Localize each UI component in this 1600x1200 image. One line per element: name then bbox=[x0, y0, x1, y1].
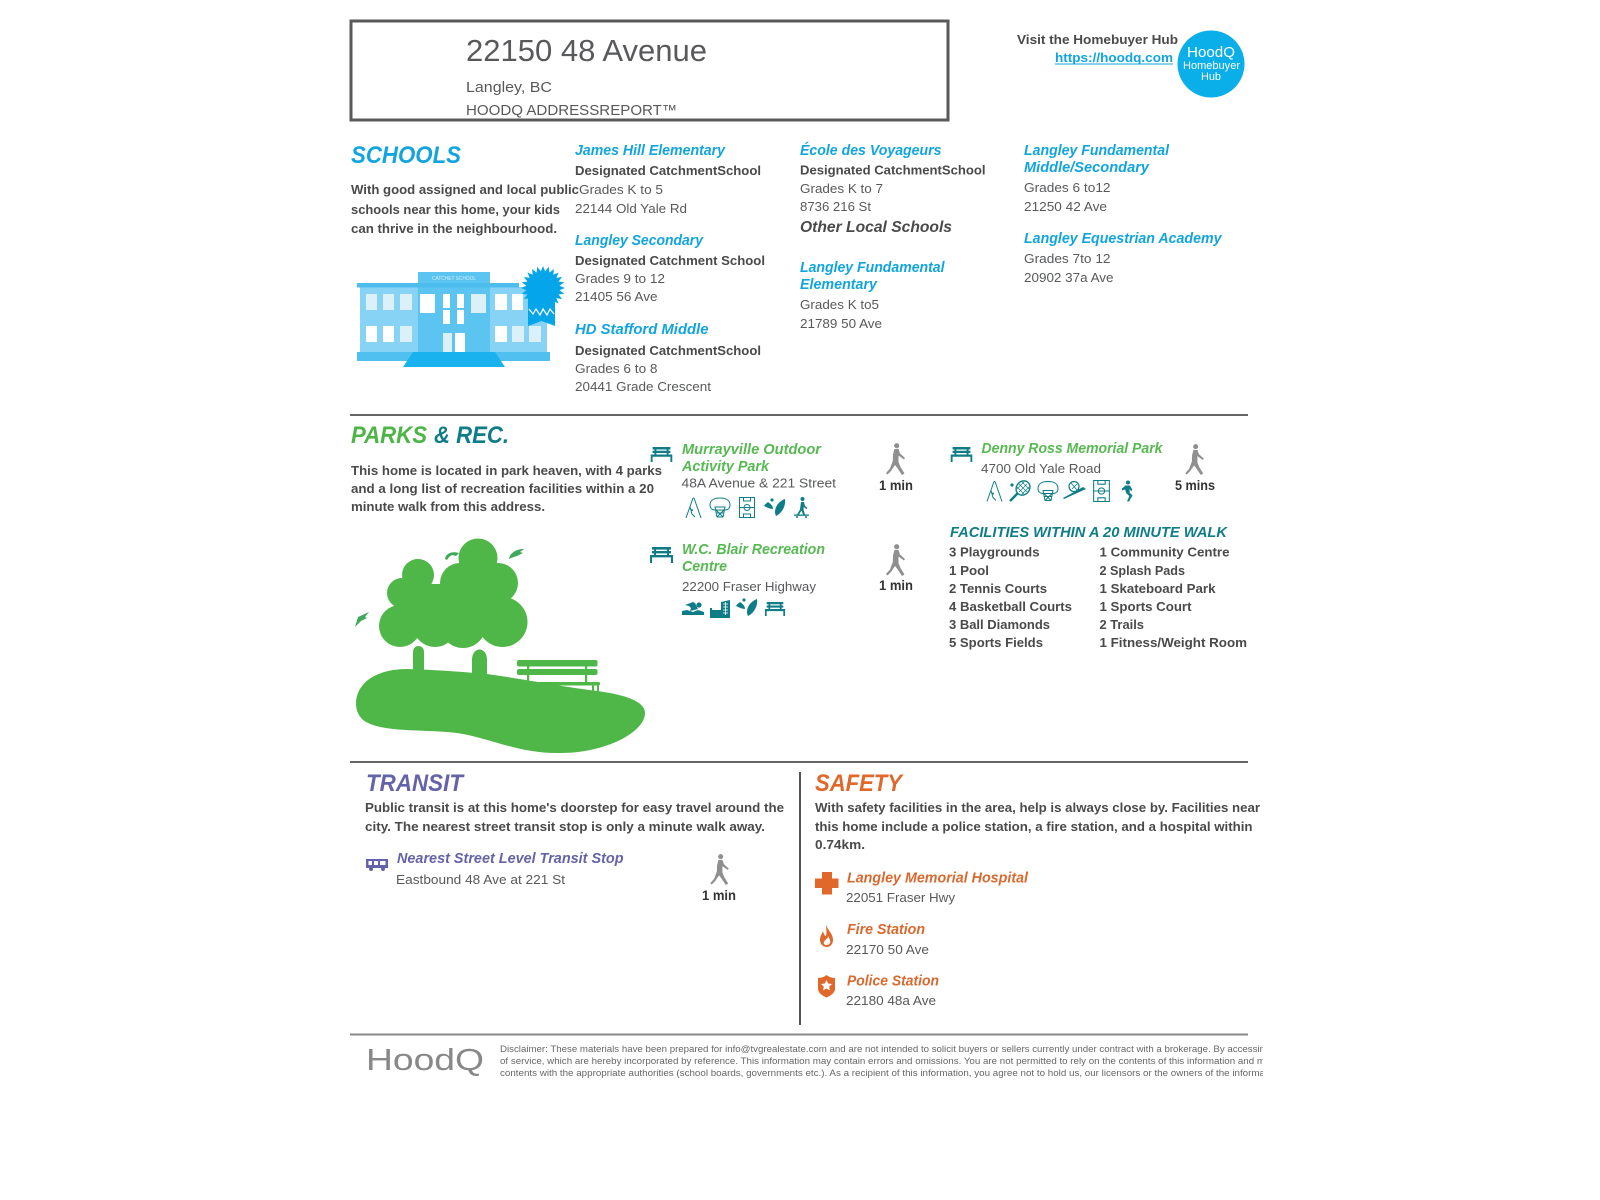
illustration: park with trees and bench bbox=[356, 538, 645, 753]
school: Langley Fundamental Elementary: Elementary bbox=[800, 277, 878, 293]
walk time bbox=[702, 854, 736, 903]
school: Ecole des Voyageurs: Designated CatchmentSchool bbox=[800, 162, 986, 178]
transit stop bbox=[396, 851, 624, 887]
school: Langley Equestrian Academy: Grades 7to 12 bbox=[1024, 251, 1110, 266]
walk time: 1 min bbox=[879, 578, 913, 593]
icon: flame bbox=[820, 924, 833, 947]
school: Langley Secondary: Grades 9 to 12 bbox=[575, 271, 665, 286]
transit intro: Public transit is at this home's doorstep for easy travel around the bbox=[365, 800, 784, 815]
homebuyer hub callout bbox=[1017, 30, 1244, 98]
facility icons bbox=[686, 497, 809, 518]
icon: bench bbox=[650, 547, 673, 563]
hub badge bbox=[1178, 30, 1244, 98]
panel: safety bbox=[815, 770, 1260, 1008]
school: Langley Equestrian Academy: 20902 37a Ave bbox=[1024, 270, 1114, 285]
header address box bbox=[351, 21, 948, 120]
facility icons bbox=[682, 598, 785, 618]
facilities right column: 2 Splash Pads bbox=[1100, 563, 1185, 578]
school: Langley Fundamental Elementary: 21789 50 Ave bbox=[800, 316, 882, 331]
walk time: 5 mins bbox=[1175, 478, 1215, 493]
schools intro: can thrive in the neighbourhood. bbox=[351, 221, 557, 236]
parks intro: minute walk from this address. bbox=[351, 499, 545, 514]
disclaimer: Disclaimer: These materials have been prepared for info@tvgrealestate.com and are not intended to solicit buyers or sellers currently under contract with a brokerage. By accessin bbox=[500, 1044, 1265, 1055]
safety intro: 0.74km. bbox=[815, 837, 865, 852]
facilities left column: 3 Playgrounds bbox=[949, 544, 1040, 560]
parks heading bbox=[351, 422, 509, 449]
park: W.C. Blair Recreation Centre: W.C. Blair Recreation bbox=[682, 542, 825, 558]
police station: 22180 48a Ave bbox=[846, 993, 936, 1008]
school: Langley Fundamental Middle/Secondary: 21250 42 Ave bbox=[1024, 199, 1107, 214]
icon: school building bbox=[357, 272, 550, 367]
walk time bbox=[879, 544, 913, 593]
school: Langley Secondary bbox=[575, 233, 765, 304]
school: Langley Secondary: Designated Catchment School bbox=[575, 253, 765, 268]
hospital: 22051 Fraser Hwy bbox=[846, 890, 955, 905]
safety intro: With safety facilities in the area, help is always close by. Facilities near bbox=[815, 800, 1260, 815]
school: Langley Secondary: 21405 56 Ave bbox=[575, 289, 658, 304]
schools intro: With good assigned and local public bbox=[351, 182, 579, 197]
park: W.C. Blair Recreation Centre: Centre bbox=[682, 559, 727, 575]
school: Langley Fundamental Elementary: Grades K to5 bbox=[800, 297, 879, 312]
school: Langley Fundamental Middle/Secondary: Langley Fundamental bbox=[1024, 143, 1170, 159]
facilities list bbox=[949, 525, 1247, 650]
school: James Hill Elementary bbox=[575, 143, 761, 216]
icon: bus bbox=[366, 859, 388, 871]
parks heading: & REC. bbox=[434, 422, 509, 449]
school: Langley Fundamental Middle/Secondary bbox=[1024, 143, 1170, 214]
facilities right column: 1 Community Centre bbox=[1100, 544, 1230, 560]
school: Langley Fundamental Elementary: Langley Fundamental bbox=[800, 260, 945, 276]
address title: 22150 48 Avenue bbox=[466, 33, 707, 68]
park: Denny Ross Memorial Park bbox=[951, 441, 1215, 502]
school: James Hill Elementary: Designated CatchmentSchool bbox=[575, 163, 761, 178]
park: W.C. Blair Recreation Centre bbox=[650, 542, 913, 618]
parks intro: and a long list of recreation facilities within a 20 bbox=[351, 481, 654, 496]
facility icons bbox=[987, 478, 1132, 502]
school: Ecole des Voyageurs bbox=[800, 142, 986, 214]
walk time: 1 min bbox=[702, 888, 736, 903]
city: Langley, BC bbox=[466, 80, 552, 96]
hub link: https://hoodq.com bbox=[1055, 50, 1173, 65]
hub badge: HoodQ bbox=[1187, 45, 1235, 61]
facilities left column: 5 Sports Fields bbox=[949, 635, 1043, 650]
disclaimer: contents with the appropriate authorities (school boards, governments etc.). As a recipient of this information, you agree not to hold us, our licensors or the owners of the informa bbox=[500, 1068, 1266, 1079]
parks intro bbox=[351, 463, 662, 514]
park: Murrayville Outdoor Activity Park: Murrayville Outdoor bbox=[682, 442, 822, 458]
hub badge: Homebuyer bbox=[1183, 60, 1240, 72]
facilities right column bbox=[1100, 544, 1247, 650]
police station: Police Station bbox=[847, 974, 939, 990]
fire station: 22170 50 Ave bbox=[846, 942, 929, 957]
school: HD Stafford Middle: Designated CatchmentSchool bbox=[575, 343, 761, 358]
hub badge: Hub bbox=[1201, 71, 1221, 83]
transit stop: Eastbound 48 Ave at 221 St bbox=[396, 872, 565, 887]
school: HD Stafford Middle: 20441 Grade Crescent bbox=[575, 379, 711, 394]
safety intro: this home include a police station, a fire station, and a hospital within bbox=[815, 819, 1252, 834]
school: James Hill Elementary: 22144 Old Yale Rd bbox=[575, 201, 687, 216]
school: Ecole des Voyageurs: École des Voyageurs bbox=[800, 142, 942, 159]
transit stop: Nearest Street Level Transit Stop bbox=[397, 851, 624, 867]
transit heading: TRANSIT bbox=[366, 770, 465, 797]
facilities left column: 2 Tennis Courts bbox=[949, 581, 1047, 596]
disclaimer: of service, which are hereby incorporated by reference. This information may contain errors and omissions. You are not permitted to rely on the contents of this information and m bbox=[500, 1056, 1265, 1067]
fire station bbox=[820, 922, 929, 957]
school: Langley Fundamental Middle/Secondary: Grades 6 to12 bbox=[1024, 180, 1110, 195]
school: Langley Fundamental Elementary bbox=[800, 260, 945, 331]
icon: medical cross bbox=[815, 872, 838, 894]
facilities right column: 1 Fitness/Weight Room bbox=[1100, 635, 1247, 650]
walk time bbox=[879, 443, 913, 493]
school: James Hill Elementary: Grades K to 5 bbox=[579, 182, 663, 197]
facilities left column bbox=[949, 544, 1072, 650]
schools intro bbox=[351, 182, 579, 236]
icon: bench bbox=[651, 447, 672, 462]
facilities right column: 1 Skateboard Park bbox=[1100, 581, 1216, 596]
icon: bench bbox=[951, 447, 972, 462]
park: W.C. Blair Recreation Centre: 22200 Fraser Highway bbox=[682, 579, 816, 594]
homebuyer hub callout: Visit the Homebuyer Hub bbox=[1017, 32, 1178, 47]
safety intro bbox=[815, 800, 1260, 852]
facilities right column: 2 Trails bbox=[1100, 617, 1144, 632]
park: Murrayville Outdoor Activity Park: Activity Park bbox=[681, 459, 770, 475]
school: HD Stafford Middle bbox=[575, 322, 761, 394]
hospital: Langley Memorial Hospital bbox=[847, 870, 1029, 886]
school: HD Stafford Middle: HD Stafford Middle bbox=[575, 322, 708, 338]
school: Langley Fundamental Middle/Secondary: Middle/Secondary bbox=[1024, 160, 1150, 176]
fire station: Fire Station bbox=[847, 922, 925, 938]
school: Ecole des Voyageurs: Grades K to 7 bbox=[800, 181, 883, 196]
facilities right column: 1 Sports Court bbox=[1100, 599, 1192, 614]
facilities left column: 3 Ball Diamonds bbox=[949, 617, 1050, 632]
icon: birds bbox=[355, 549, 524, 627]
park: Murrayville Outdoor Activity Park: 48A Avenue & 221 Street bbox=[682, 476, 836, 490]
panel: transit bbox=[365, 770, 784, 903]
facilities left column: 1 Pool bbox=[949, 563, 989, 578]
walk time bbox=[1175, 444, 1215, 493]
school: Langley Secondary: Langley Secondary bbox=[575, 233, 704, 249]
footer logo: HoodQ bbox=[366, 1042, 484, 1077]
hospital bbox=[815, 870, 1029, 905]
panel: schools bbox=[351, 142, 1222, 394]
park: Denny Ross Memorial Park: 4700 Old Yale Road bbox=[981, 461, 1101, 476]
facilities heading: FACILITIES WITHIN A 20 MINUTE WALK bbox=[950, 525, 1228, 541]
walk time: 1 min bbox=[879, 478, 913, 493]
transit intro: city. The nearest street transit stop is only a minute walk away. bbox=[365, 819, 765, 834]
park: Murrayville Outdoor Activity Park bbox=[651, 442, 913, 518]
facilities left column: 4 Basketball Courts bbox=[949, 599, 1072, 614]
schools heading: SCHOOLS bbox=[351, 142, 461, 169]
icon: school building: CATCHET SCHOOL bbox=[432, 276, 476, 282]
parks heading: PARKS bbox=[351, 422, 427, 449]
police station bbox=[818, 974, 939, 1008]
transit intro bbox=[365, 800, 784, 834]
disclaimer bbox=[500, 1044, 1266, 1079]
school: Langley Equestrian Academy: Langley Equestrian Academy bbox=[1024, 231, 1222, 247]
safety heading: SAFETY bbox=[815, 770, 904, 797]
school: James Hill Elementary: James Hill Elementary bbox=[575, 143, 726, 159]
other local schools heading: Other Local Schools bbox=[800, 219, 952, 236]
schools intro: schools near this home, your kids bbox=[351, 202, 560, 217]
report label: HOODQ ADDRESSREPORT™ bbox=[466, 103, 677, 119]
icon: shield bbox=[818, 975, 835, 998]
school: HD Stafford Middle: Grades 6 to 8 bbox=[575, 361, 658, 376]
school: Ecole des Voyageurs: 8736 216 St bbox=[800, 199, 871, 214]
park: Denny Ross Memorial Park: Denny Ross Memorial Park bbox=[982, 441, 1163, 457]
parks intro: This home is located in park heaven, with 4 parks bbox=[351, 463, 662, 478]
icon: award ribbon bbox=[519, 264, 567, 326]
panel: parks and recreation bbox=[351, 422, 1247, 753]
school: Langley Equestrian Academy bbox=[1024, 231, 1222, 285]
